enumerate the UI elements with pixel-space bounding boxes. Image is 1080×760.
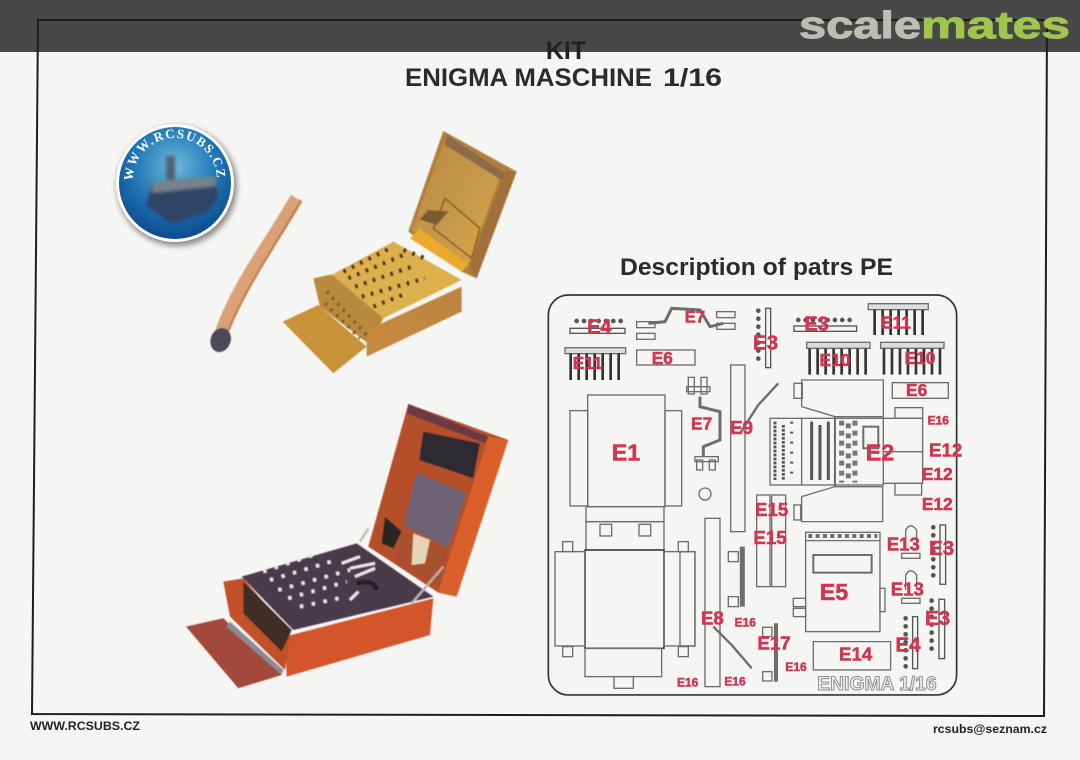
red part labels: E17 [757, 632, 791, 653]
red part labels: E16 [677, 676, 699, 690]
photo: brass model [283, 131, 517, 373]
parts E6 [637, 350, 948, 398]
red part labels: E3 [753, 331, 778, 354]
red part labels: E13 [891, 579, 924, 600]
red part labels: E16 [928, 413, 949, 427]
red part labels: E6 [652, 348, 673, 368]
watermark logo: mates [921, 5, 1070, 47]
red part labels: E13 [887, 534, 920, 555]
red part labels: E7 [691, 413, 712, 433]
red part labels [573, 308, 962, 690]
red part labels: E11 [881, 312, 911, 332]
red part labels: E5 [820, 579, 848, 605]
red part labels: E12 [922, 494, 953, 514]
red part labels: E3 [804, 314, 829, 336]
red part labels: E8 [701, 607, 724, 628]
red part labels: E15 [755, 499, 788, 520]
parts E7 [637, 308, 735, 500]
fret title: ENIGMA 1/16 [817, 674, 937, 695]
red part labels: E1 [612, 440, 640, 466]
red part labels: E10 [820, 350, 850, 370]
watermark logo [799, 5, 1070, 47]
title: KIT: KIT [546, 37, 586, 65]
red part labels: E16 [785, 660, 807, 674]
red part labels: E4 [587, 316, 612, 338]
red part labels: E9 [730, 417, 753, 438]
combs E10 E11 [565, 304, 944, 367]
footer: website: WWW.RCSUBS.CZ [30, 719, 140, 733]
photo: original wooden enigma [186, 404, 508, 688]
part E1 [555, 395, 695, 688]
part E2 [770, 380, 923, 522]
parts E13 E17 [728, 526, 920, 682]
red part labels: E2 [866, 440, 894, 466]
badge: rcsubs logo [113, 122, 241, 250]
panel: photo-etched fret [548, 295, 962, 695]
heading: description: Description of patrs PE [620, 254, 893, 281]
red part labels: E10 [905, 348, 935, 368]
red part labels: E4 [895, 634, 921, 657]
photo: matchstick [207, 198, 301, 355]
title: Enigma Maschine: 1/16 [663, 64, 722, 92]
red part labels: E6 [906, 380, 928, 400]
part E5 [793, 532, 885, 632]
header bar [0, 0, 1080, 52]
red part labels: E3 [925, 607, 950, 630]
badge: rcsubs logo: WWW.RCSUBS.CZ [124, 130, 226, 180]
red part labels: E12 [929, 440, 962, 461]
red part labels: E16 [735, 616, 756, 630]
fret outline [548, 295, 957, 695]
red part labels: E11 [573, 353, 603, 373]
red part labels: E16 [724, 674, 746, 688]
red part labels: E3 [929, 537, 954, 560]
red part labels: E15 [753, 527, 787, 548]
watermark logo: scale [799, 5, 921, 47]
strips E8 E9 E15 [705, 365, 786, 687]
combs E3 E4 [570, 308, 946, 669]
part E14 [813, 642, 891, 670]
red part labels: E14 [839, 644, 873, 665]
title: Enigma Maschine: ENIGMA MASCHINE [405, 64, 652, 92]
footer: email: rcsubs@seznam.cz [933, 724, 1047, 736]
red part labels: E7 [685, 308, 705, 327]
red part labels: E12 [922, 464, 953, 484]
